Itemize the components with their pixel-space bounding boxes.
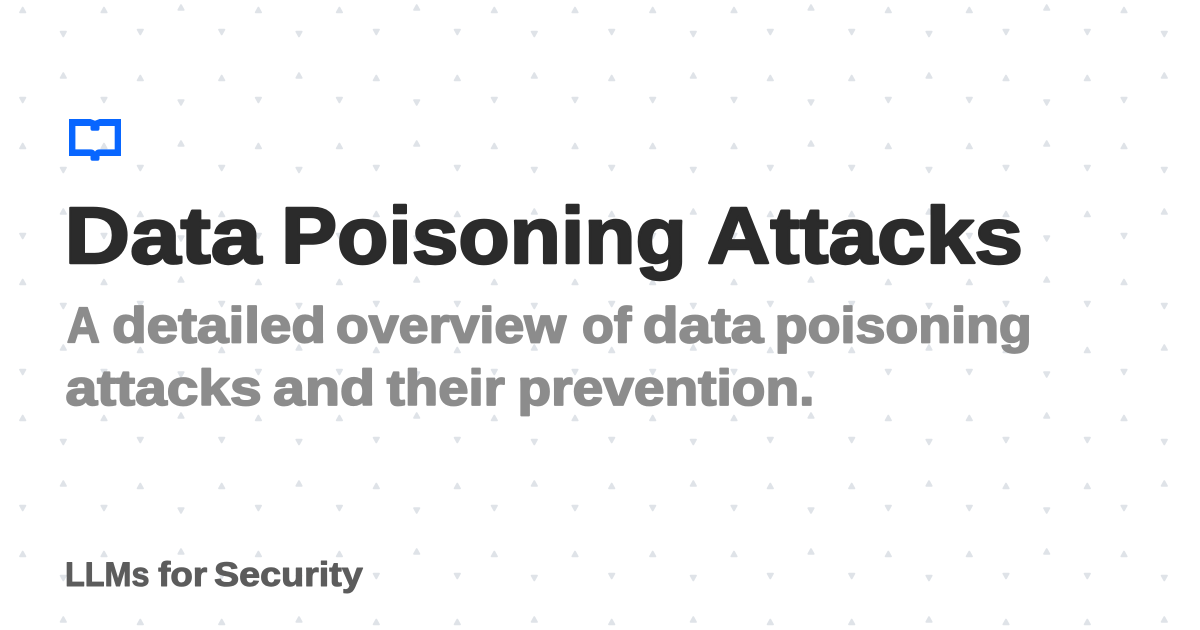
title: Poisoning [281, 191, 687, 280]
subtitle: of [582, 297, 632, 353]
subtitle: attacks [66, 360, 262, 416]
subtitle: overview [336, 297, 566, 353]
subtitle: poisoning [775, 297, 1032, 353]
footer label: Security [214, 556, 363, 594]
footer label: LLMs [65, 556, 150, 594]
title [64, 191, 1023, 280]
footer label [65, 556, 363, 594]
title: Attacks [707, 191, 1023, 280]
title: Data [64, 191, 262, 280]
subtitle: and [273, 360, 375, 416]
subtitle: data [643, 297, 765, 353]
subtitle: detailed [112, 297, 326, 353]
icon: open book [69, 119, 121, 161]
footer label: for [158, 556, 207, 594]
subtitle [66, 297, 1032, 416]
subtitle: prevention. [518, 360, 814, 416]
subtitle: their [387, 360, 505, 416]
subtitle: A [67, 297, 100, 353]
